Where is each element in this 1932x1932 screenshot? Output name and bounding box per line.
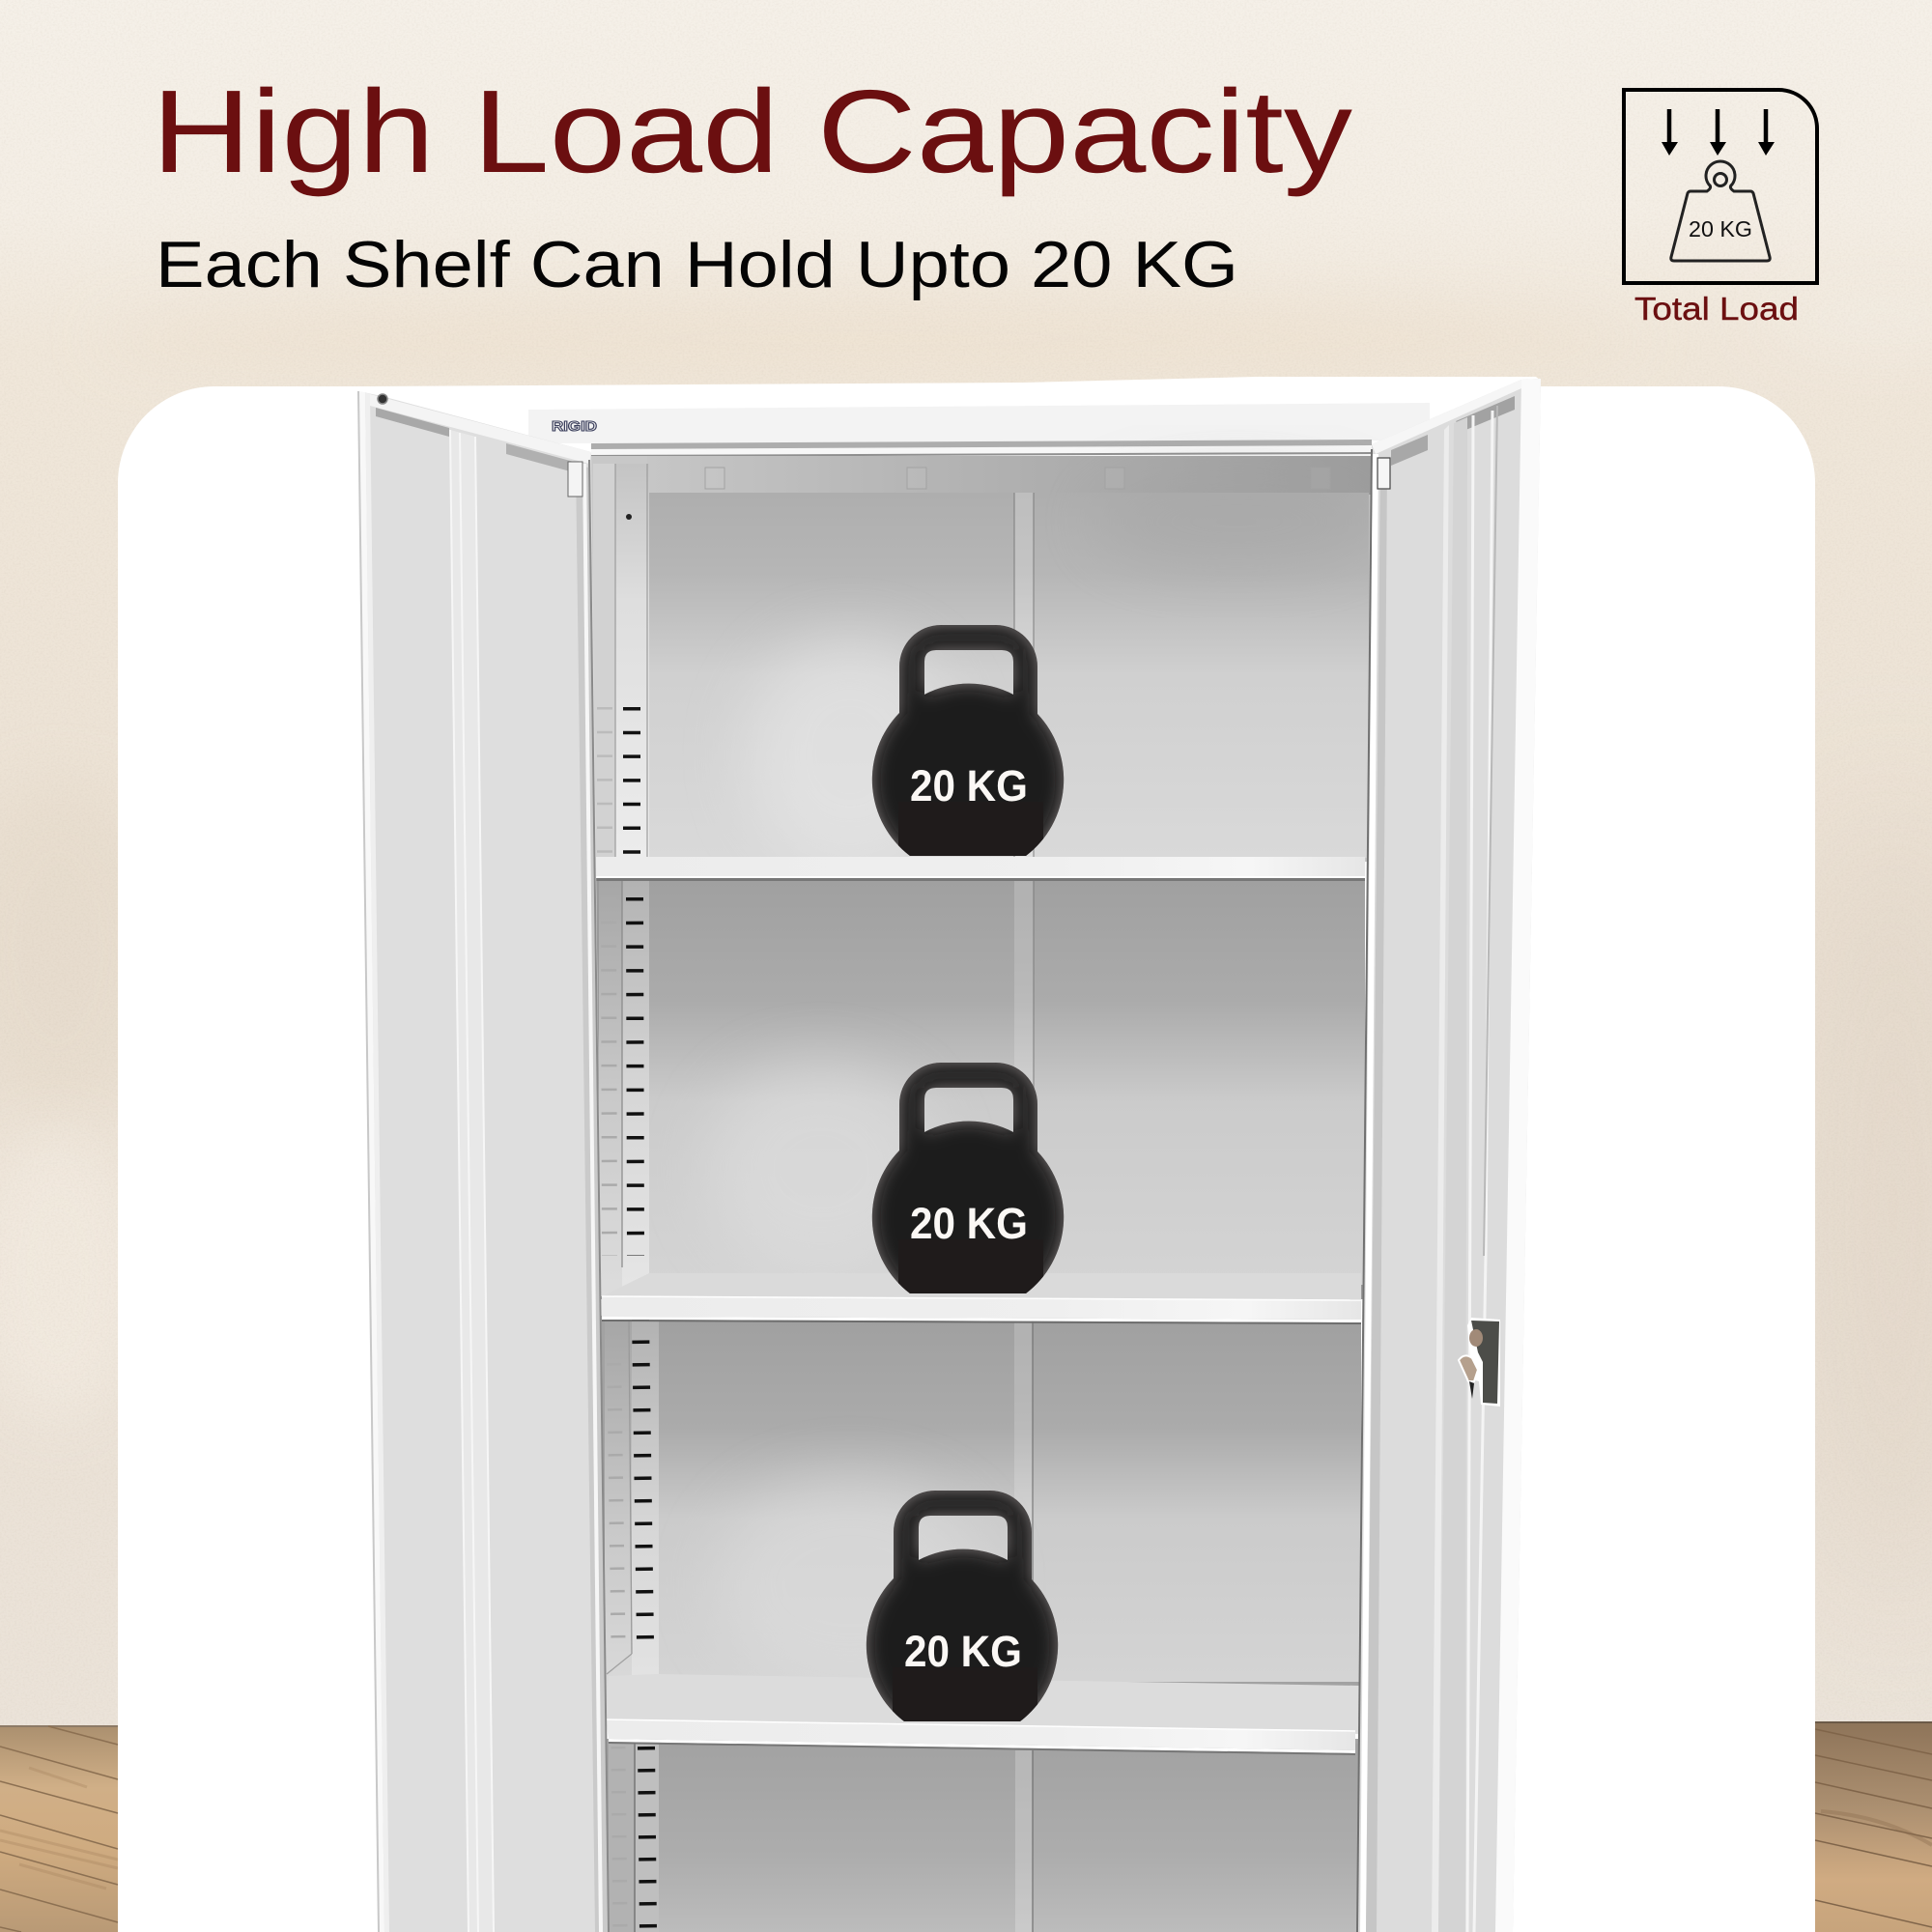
icon: total load badge [1624, 90, 1817, 283]
kettlebell: third shelf [866, 1491, 1059, 1721]
title: High Load Capacity [152, 66, 1352, 197]
compartment: second [596, 874, 1365, 1300]
wooden floor, left [0, 1725, 118, 1932]
logo: RIGID [552, 418, 597, 435]
compartment: third [601, 1316, 1361, 1734]
icon frame [1624, 90, 1817, 283]
right door [1357, 379, 1541, 1932]
kettlebell: second shelf: 20 KG [910, 1199, 1028, 1248]
white content panel [118, 386, 1815, 1932]
kettlebell: third shelf: 20 KG [904, 1627, 1022, 1676]
wooden floor, right [1815, 1721, 1932, 1932]
left door [358, 391, 609, 1932]
weight label: 20 KG [1689, 216, 1752, 242]
shelf two [602, 1296, 1361, 1324]
kettlebell: second shelf [871, 1063, 1065, 1293]
shelf three [606, 1719, 1355, 1755]
icon caption: Total Load [1634, 291, 1799, 327]
icon: down arrows [1662, 109, 1775, 156]
compartment: bottom [607, 1739, 1358, 1932]
shelf one [596, 857, 1365, 881]
door lock with key [1459, 1318, 1500, 1406]
kettlebell: top shelf: 20 KG [910, 761, 1028, 810]
subtitle: Each Shelf Can Hold Upto 20 KG [156, 228, 1238, 301]
cabinet top [359, 377, 1541, 464]
cabinet [358, 377, 1541, 1932]
compartment: top [591, 456, 1381, 869]
icon: weight [1671, 161, 1770, 261]
kettlebell: top shelf [871, 625, 1065, 856]
